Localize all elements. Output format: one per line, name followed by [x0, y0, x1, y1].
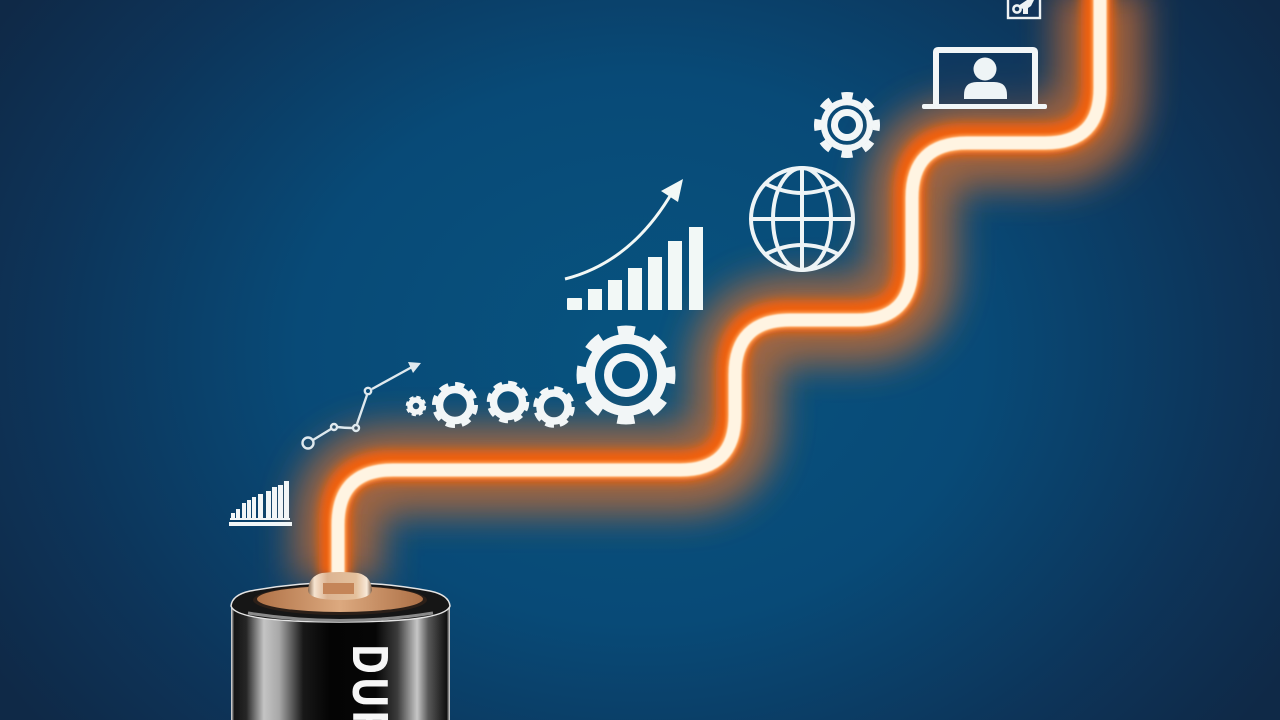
icon: medium gear: [818, 96, 876, 154]
battery positive terminal: [308, 572, 372, 600]
arrow: growth curve: [565, 179, 683, 279]
gear: tiny: [408, 398, 424, 414]
icon: laptop with user: [922, 50, 1047, 109]
battery: [231, 572, 450, 720]
battery top cap: [231, 582, 450, 622]
gear: second small: [490, 384, 526, 420]
icon: globe: [751, 168, 853, 271]
icon: row of small gears: [408, 384, 572, 425]
gear: third small: [536, 389, 572, 425]
icon: small bar chart: [229, 481, 292, 526]
glowing power line: [335, 0, 1100, 580]
gear: first small: [435, 385, 475, 425]
icon: key badge at top edge: [1008, 0, 1040, 18]
icon: line chart with arrow: [302, 362, 421, 448]
icon: rising bars: [567, 227, 703, 310]
battery body: [231, 582, 450, 720]
icon: large gear: [581, 330, 671, 420]
